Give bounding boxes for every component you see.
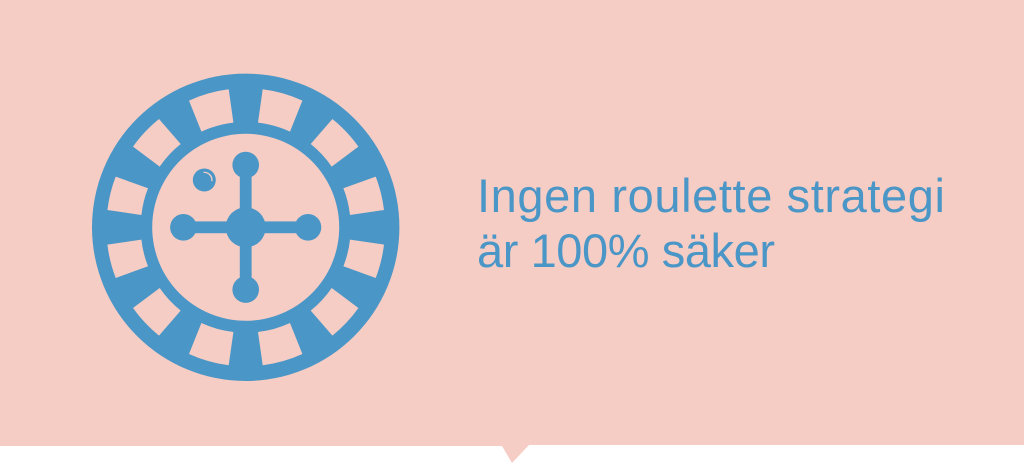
roulette ball [193,168,216,192]
heading line 1: Ingen roulette strategi [477,169,945,222]
wheel pockets [107,89,384,365]
wheel outer ring [92,74,399,381]
heading line 2: är 100% säker [477,224,775,277]
icon: roulette wheel [92,74,399,381]
wheel inner disc [152,134,339,321]
spinner cross [170,152,321,303]
heading text [477,169,945,277]
